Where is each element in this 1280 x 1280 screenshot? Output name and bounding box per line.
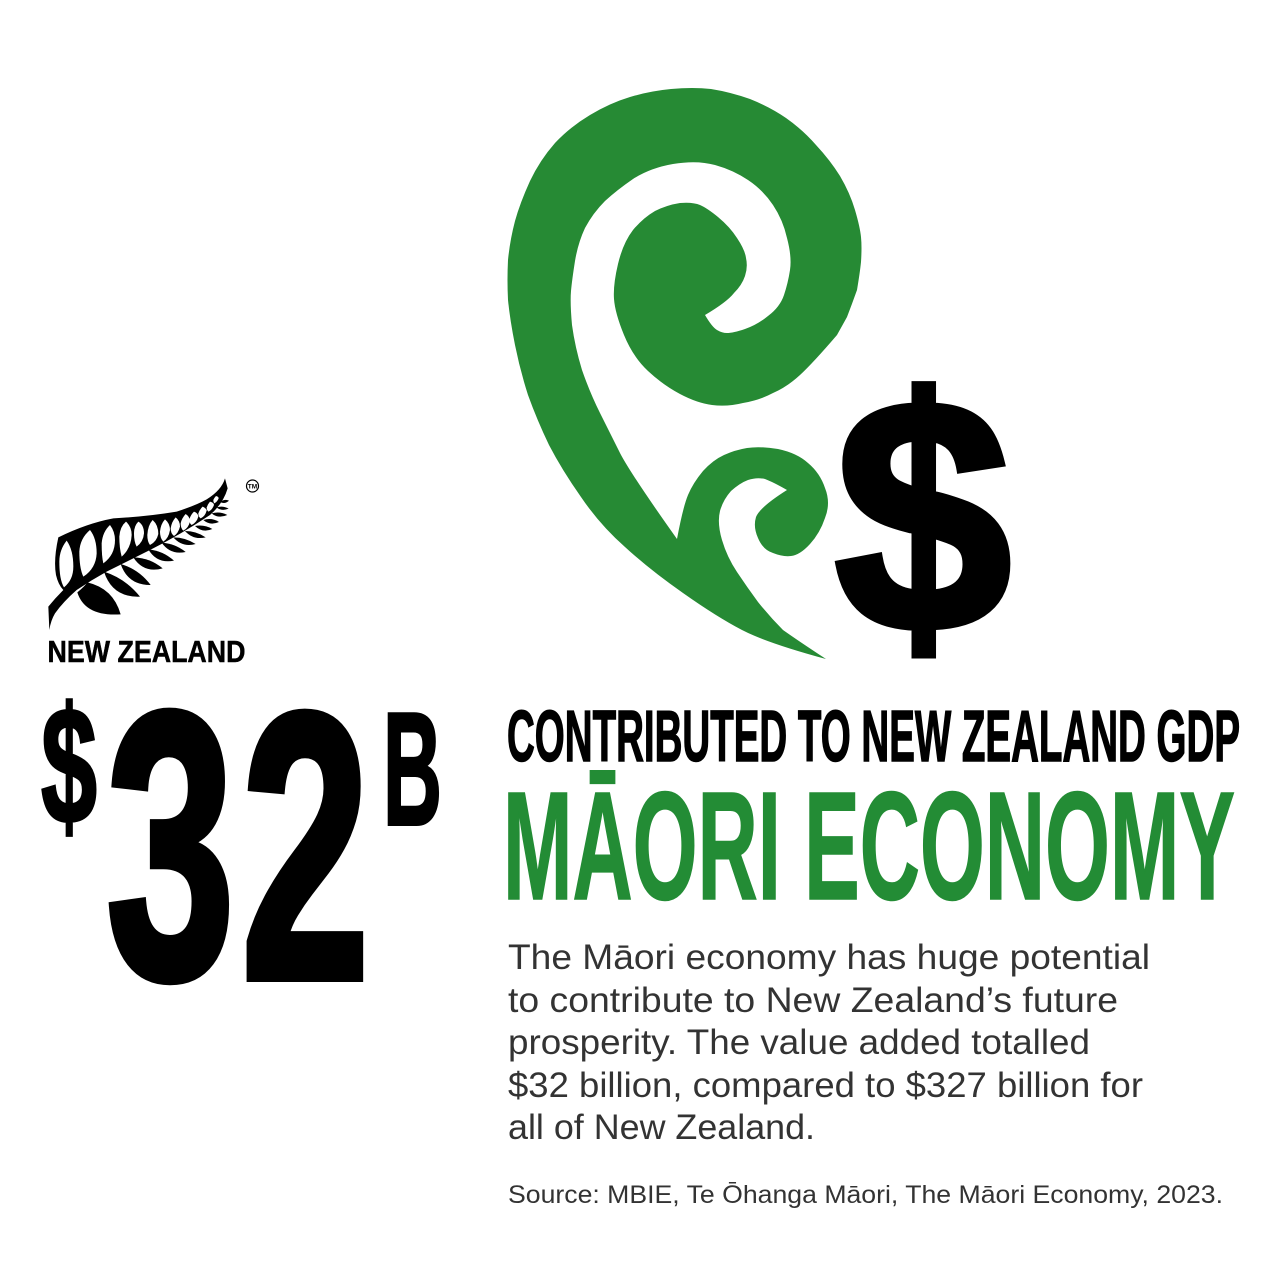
icon: silver fern — [48, 478, 229, 630]
big stat: $32B: $ — [41, 674, 97, 859]
big stat: $32B: 3 — [106, 633, 235, 1058]
big stat: $32B: 2 — [241, 634, 370, 1059]
body text: prosperity. The value added totalled — [508, 1023, 1090, 1062]
source note: Source: MBIE, Te Ōhanga Māori, The Māori Economy, 2023. — [508, 1181, 1223, 1209]
trademark symbol: TM — [248, 484, 257, 490]
logo: silver fern New Zealand — [48, 478, 258, 669]
logo wordmark: NEW ZEALAND — [48, 635, 246, 669]
body text: all of New Zealand. — [508, 1108, 815, 1147]
body text: to contribute to New Zealand’s future — [508, 981, 1118, 1020]
body text: The Māori economy has huge potential — [508, 938, 1150, 977]
icon: green koru spiral — [508, 88, 862, 659]
trademark symbol — [246, 480, 258, 492]
body text: $32 billion, compared to $327 billion for — [508, 1066, 1143, 1105]
body text — [508, 938, 1150, 1147]
icon: black dollar sign: $ — [835, 331, 1011, 700]
big stat: $32B — [41, 633, 442, 1059]
big stat: $32B: B — [383, 680, 442, 860]
